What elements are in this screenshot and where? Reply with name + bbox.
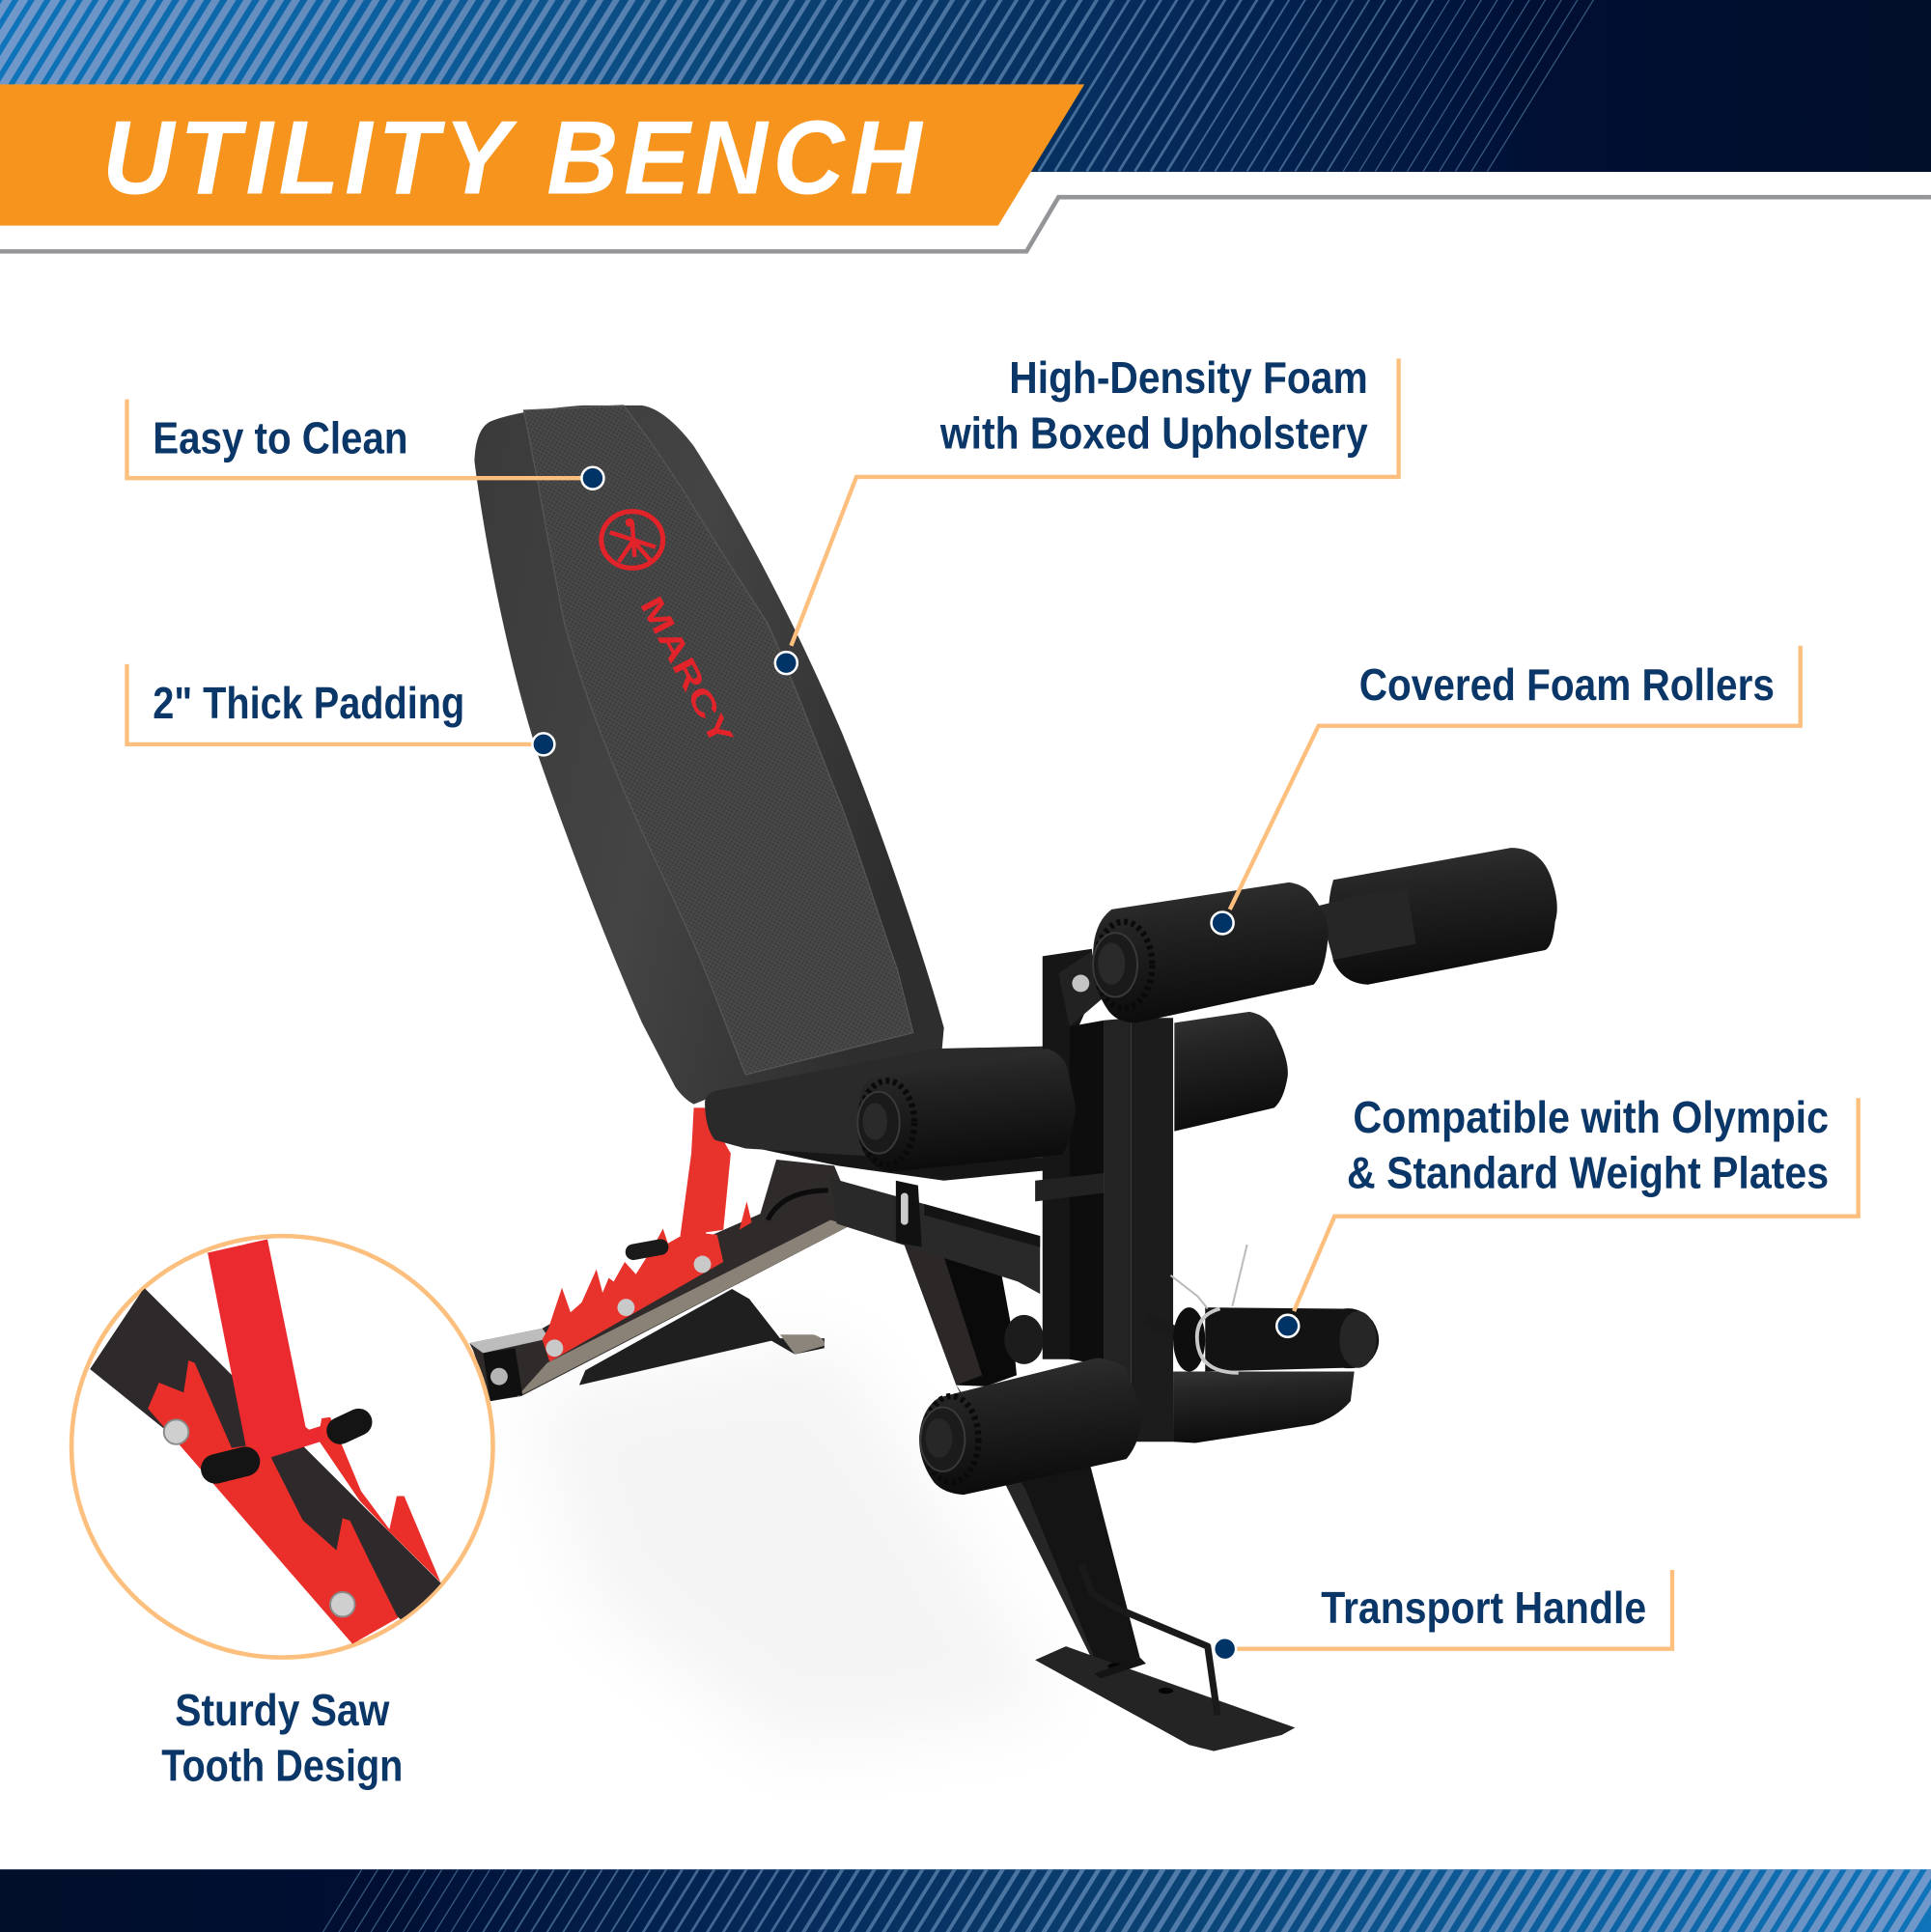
backrest [474, 406, 944, 1105]
callout: covered foam rollers: Covered Foam Rollers [1359, 659, 1775, 710]
red saw plate upper [318, 1417, 440, 1582]
red saw tooth plate [543, 1201, 752, 1361]
rear leg face [902, 1239, 982, 1386]
column [1035, 949, 1173, 1442]
header outline [0, 197, 1931, 251]
red strut [681, 1107, 731, 1236]
rear low roller [1173, 1372, 1355, 1443]
callout: easy to clean [126, 400, 603, 490]
front upper roller [1093, 882, 1329, 1022]
callout: transport handle [1214, 1570, 1672, 1660]
inset circle: saw tooth detail [71, 1236, 493, 1658]
red cross bar [253, 1433, 322, 1455]
front low roller [919, 1358, 1142, 1495]
footer band [0, 1861, 1931, 1932]
callout: thick padding [126, 664, 554, 755]
logo [602, 512, 663, 568]
caption: sturdy saw tooth: Sturdy Saw [175, 1685, 390, 1735]
bench photo illustration [469, 406, 1557, 1751]
rear leg upper [902, 1239, 1017, 1386]
dark beam [90, 1288, 441, 1624]
lower leg [956, 1386, 1140, 1673]
callout: easy to clean: Easy to Clean [153, 413, 407, 463]
cross bar [830, 1178, 1040, 1294]
back upper roller [1329, 848, 1557, 985]
callout: compatible weight plates: & Standard Weight Plates [1347, 1147, 1829, 1197]
header band [0, 0, 1931, 172]
front seat roller [857, 1049, 1076, 1172]
backrest textured panel [523, 406, 913, 1075]
rear stand [579, 1289, 825, 1386]
seat frame [746, 1146, 1140, 1673]
callout: compatible weight plates: Compatible with Olympic [1353, 1092, 1829, 1142]
back lower roller [1174, 1012, 1288, 1132]
title banner [0, 84, 1084, 226]
callout: covered foam rollers [1212, 646, 1801, 934]
rear beam [469, 1160, 849, 1401]
callout: high density foam: with Boxed Upholstery [939, 408, 1368, 459]
callout: thick padding: 2" Thick Padding [153, 678, 464, 728]
bolt upper [164, 1419, 188, 1444]
red saw plate lower [148, 1360, 398, 1644]
caption: sturdy saw tooth: Tooth Design [161, 1740, 403, 1790]
seat [705, 1047, 1060, 1159]
callout: high density foam [775, 352, 1399, 674]
roller bracket [1319, 888, 1415, 960]
weight plate sleeve [1146, 1245, 1379, 1373]
callout: high density foam: High-Density Foam [1009, 352, 1368, 403]
floor shadow [530, 1343, 1060, 1750]
transport handle bar [1082, 1565, 1217, 1716]
callout: compatible weight plates [1276, 1092, 1859, 1337]
foot plate [1035, 1646, 1295, 1751]
bolt lower [330, 1592, 355, 1617]
red upright [208, 1239, 318, 1462]
caption: sturdy saw tooth [161, 1685, 403, 1790]
right pin [340, 1422, 358, 1431]
title: UTILITY BENCH [102, 99, 924, 216]
callout: transport handle: Transport Handle [1321, 1582, 1646, 1633]
brand wordmark: MARCY [632, 591, 740, 752]
left pin [215, 1462, 245, 1469]
